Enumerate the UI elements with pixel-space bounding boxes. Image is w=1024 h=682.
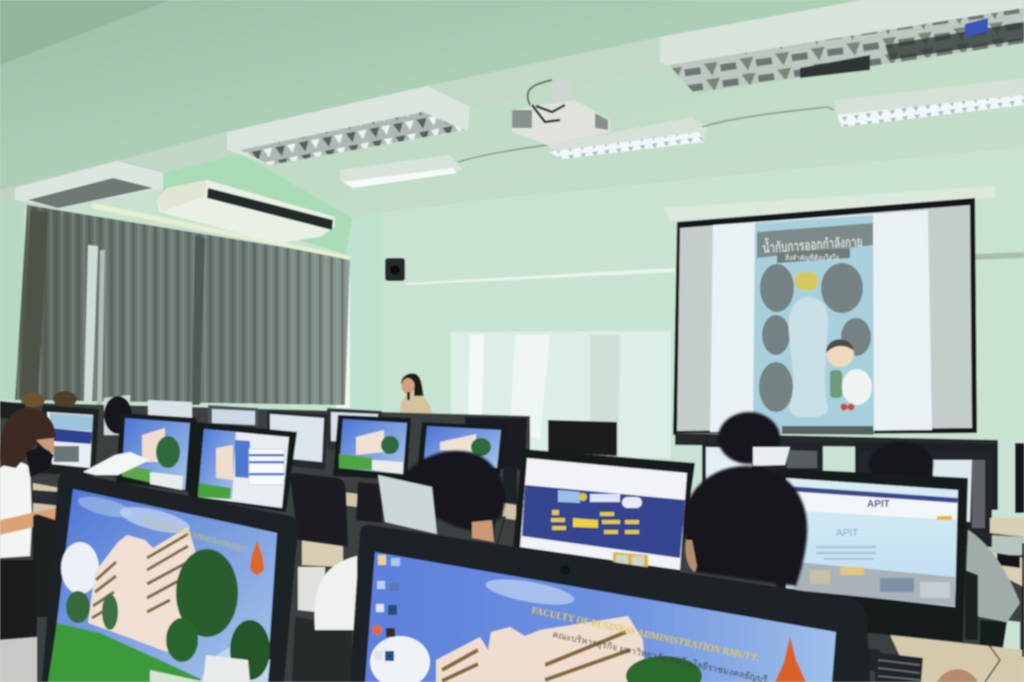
student heads near back <box>718 412 933 486</box>
desk and keyboard bottom right <box>866 543 1024 682</box>
projector screen <box>673 198 977 437</box>
whiteboard <box>451 331 671 458</box>
poster on screen: สิ่งสำคัญที่ต้องใส่ใจ <box>785 253 840 262</box>
student: centre with glasses <box>314 451 505 630</box>
chairs <box>290 473 382 682</box>
light fixture: top right <box>660 0 1024 93</box>
light fixture: centre left <box>227 86 470 165</box>
paper held up left <box>83 452 150 475</box>
poster on screen: น้ำกับการออกกำลังกาย <box>762 231 863 256</box>
paper in centre <box>378 475 437 534</box>
projector screen housing <box>665 186 995 221</box>
monitor row 2: desktop wallpaper <box>116 413 197 492</box>
wall speaker <box>385 258 405 281</box>
light fixture: middle <box>340 155 463 188</box>
monitor: APIT website: APIT <box>867 499 890 510</box>
back row monitors <box>21 391 1024 547</box>
monitor row 2: far left <box>0 401 99 476</box>
monitor: APIT website <box>776 468 968 642</box>
foreground monitor centre: FACULTY OF BUSINESS ADMINISTRATION RMUTT. <box>530 605 760 664</box>
foreground monitor left <box>42 472 298 682</box>
student on right in grey shirt <box>965 530 1020 648</box>
paper by back monitor <box>753 447 790 466</box>
foreground monitor left: FACULTY OF BUSINESS ADMINISTRATION RMUTT. <box>142 516 249 555</box>
light fixture: far left <box>15 161 163 208</box>
curtain <box>15 203 350 405</box>
tables <box>33 483 1024 650</box>
air conditioner <box>157 180 335 243</box>
foreground monitor centre <box>350 525 870 682</box>
student: woman with mask on left <box>0 408 60 682</box>
light fixture: under projector <box>547 117 707 159</box>
student: large foreground head <box>684 466 807 586</box>
presenter <box>400 373 432 413</box>
poster on screen <box>753 215 874 437</box>
dark lower room layer <box>0 402 1024 682</box>
light fixture: far right <box>834 78 1024 127</box>
monitor: APIT website: APIT <box>836 528 858 539</box>
monitor: website with blue section <box>513 449 695 572</box>
monitor row 2: centre left <box>333 415 411 480</box>
projector with cables <box>458 80 834 162</box>
monitor row 2: centre right <box>418 422 506 474</box>
monitor row 2: browser window <box>188 422 297 512</box>
